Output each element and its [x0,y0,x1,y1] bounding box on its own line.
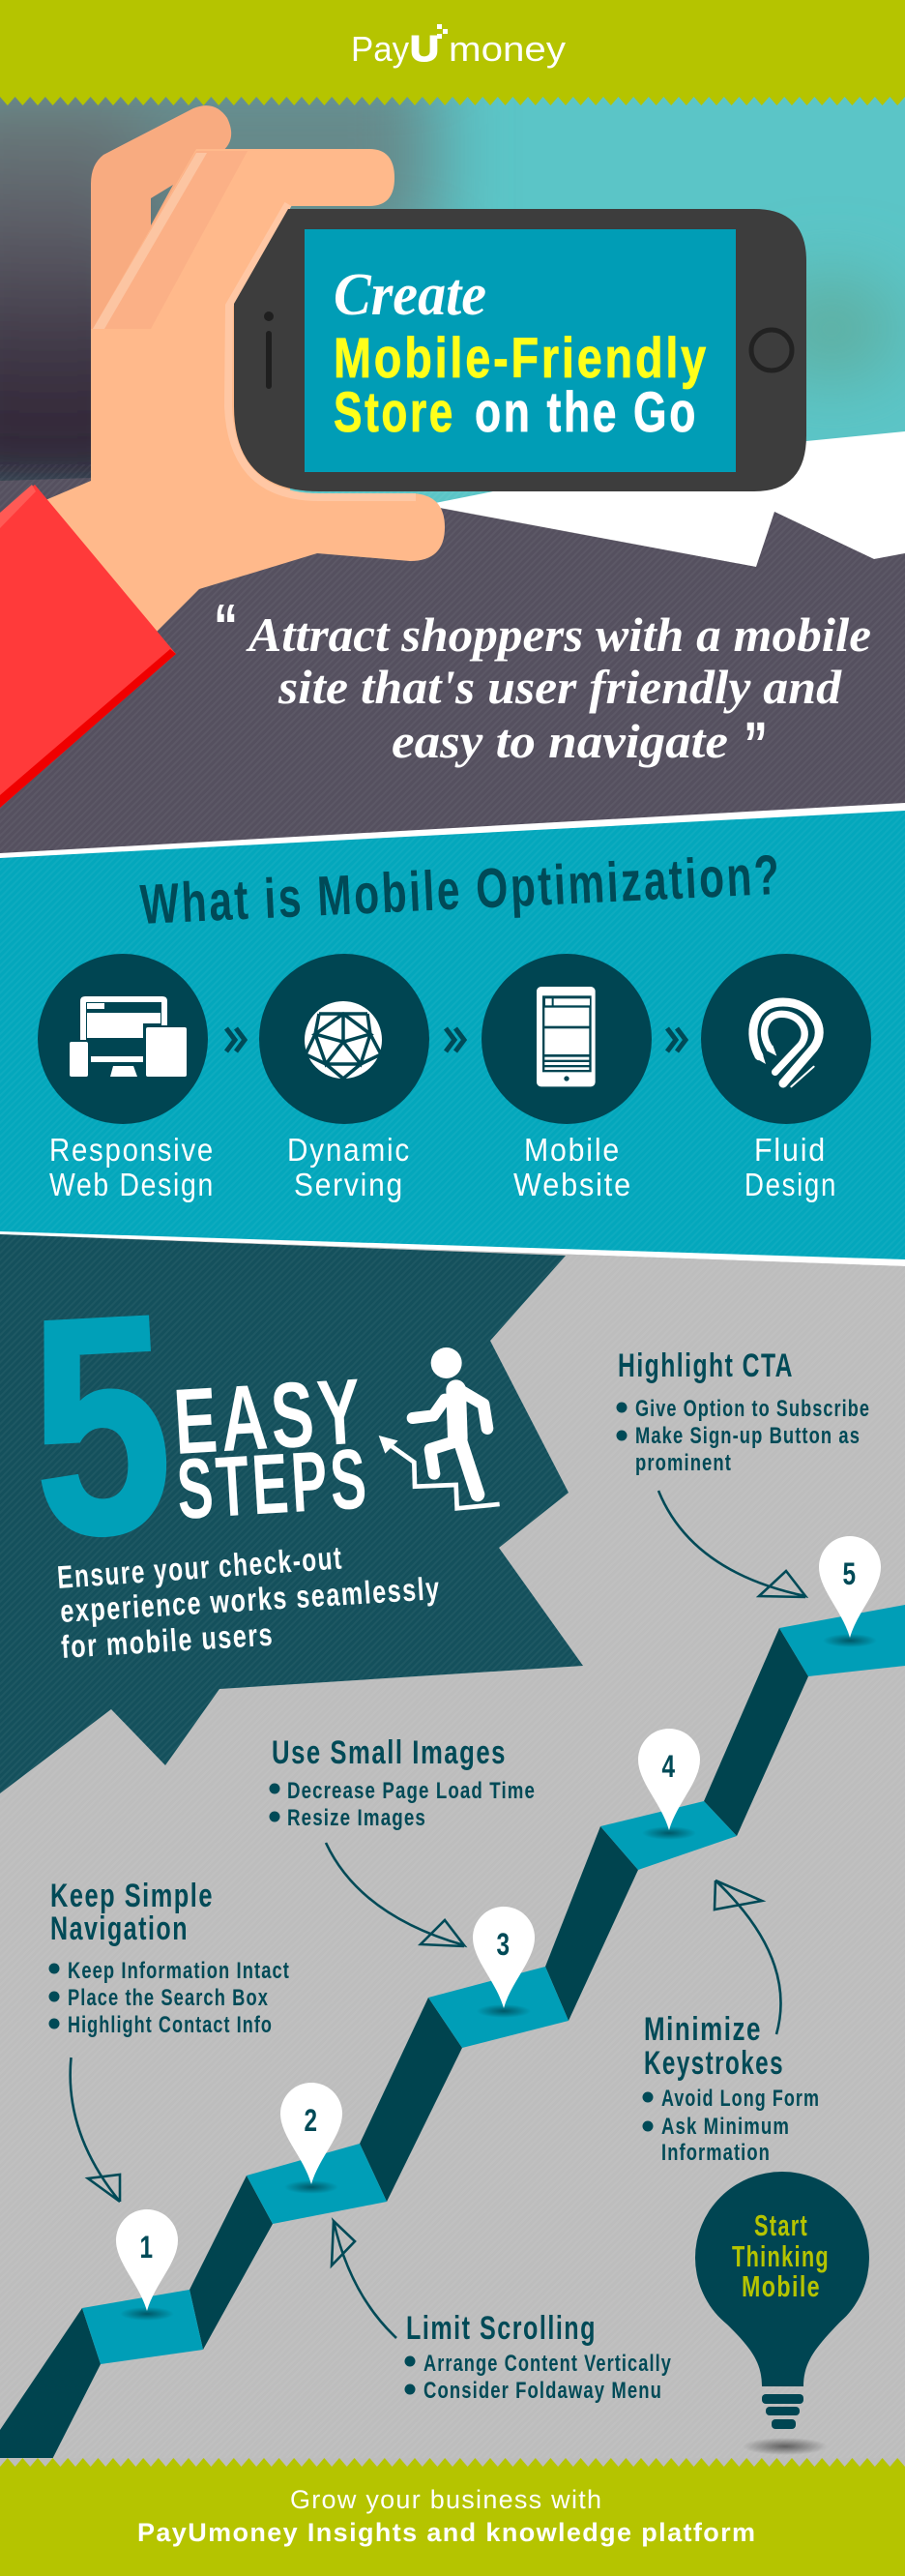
phone speaker [264,311,274,389]
tagline: experience works seamlessly [59,1570,442,1629]
headline: Store [334,381,455,444]
light bulb: start thinking mobile [695,2172,869,2455]
item: mobile website [482,954,652,1202]
heading: 5 easy steps [24,1251,372,1601]
item: dynamic serving [259,954,429,1202]
pin 4 [638,1729,700,1840]
quote [214,591,871,779]
phone home button [751,330,792,370]
label [513,1132,632,1202]
step 2: limit scrolling: Arrange Content Vertically [423,2351,672,2377]
quote: easy to navigate [392,714,728,768]
dark risers [0,1628,808,2476]
step 3: use small images: Use Small Images [272,1734,507,1771]
header bar [0,0,905,105]
pin 4: 4 [661,1749,677,1784]
arrow: to step 5 [658,1491,805,1597]
label: Responsive [49,1132,215,1168]
palm highlight [228,204,416,497]
teal treads [82,1605,905,2364]
pin 2 [280,2083,342,2194]
heading: 5 easy steps: EASY [171,1359,367,1474]
quote: Attract shoppers with a mobile [246,607,871,662]
logo: PayUmoney: money [449,29,566,69]
footer [0,2458,905,2576]
item: fluid design [701,954,871,1202]
footer: PayUmoney Insights and knowledge platform [137,2518,755,2547]
hero dark panel [0,478,905,871]
icon: geodesic sphere [305,1001,382,1079]
footer: Grow your business with [290,2485,601,2514]
icon: person climbing stairs [379,1347,500,1508]
step 1: keep simple navigation: Keep Simple [50,1878,214,1914]
step 1: keep simple navigation: Navigation [50,1910,189,1947]
tagline: Ensure your check-out [56,1539,344,1595]
heading: 5 easy steps: STEPS [174,1430,372,1537]
step 2: limit scrolling: Limit Scrolling [406,2310,597,2347]
step 4: minimize keystrokes: Ask Minimum [661,2114,790,2140]
step 3: use small images [269,1734,536,1831]
label: Fluid [754,1132,827,1168]
back finger [91,105,231,334]
sleeve [0,485,176,808]
light bulb: start thinking mobile: Thinking [732,2239,830,2273]
step 4: minimize keystrokes [642,2011,820,2166]
step 4: minimize keystrokes: Minimize [644,2011,762,2048]
arrow: chevrons 3 [667,1028,686,1051]
logo: PayUmoney [351,24,566,69]
step 5: highlight CTA: prominent [635,1450,732,1476]
icon: devices [70,996,187,1077]
tagline [56,1539,442,1665]
step 2: limit scrolling [404,2310,672,2404]
hero background [0,97,905,503]
logo: PayUmoney: U [410,29,439,69]
section: five steps background [0,1234,905,2476]
step 1: keep simple navigation: Highlight Contact Info [68,2012,273,2038]
hero lower white shard [425,431,905,567]
step 5: highlight CTA [617,1347,870,1476]
front finger and palm [39,149,445,643]
step 4: minimize keystrokes: Information [661,2140,771,2166]
closing quote mark: ” [744,709,771,779]
step 3: use small images: Decrease Page Load Time [287,1778,536,1804]
step 4: minimize keystrokes: Keystrokes [644,2045,784,2082]
decorative hatch [0,464,905,2476]
pin 1: 1 [139,2230,155,2265]
arrow: to step 1 [71,2058,120,2202]
headline: on the Go [475,381,698,444]
arrow: to step 3 [326,1843,464,1946]
phone screen [305,229,736,472]
light bulb: start thinking mobile: Mobile [742,2269,821,2303]
arrow: to step 2 [332,2221,396,2338]
label: Mobile [524,1132,621,1168]
step 2: limit scrolling: Consider Foldaway Menu [423,2378,662,2404]
label: Web Design [49,1167,215,1202]
light bulb: start thinking mobile: Start [754,2208,808,2242]
icon: phone [537,987,596,1086]
arrow: to step 4 [715,1880,781,2034]
item: responsive web design [38,954,215,1202]
arrow: chevrons 2 [446,1028,464,1051]
section: what is mobile optimization background [0,803,905,1266]
finger mid-tone [93,151,248,329]
label: Dynamic [287,1132,411,1168]
step 4: minimize keystrokes: Avoid Long Form [661,2086,820,2112]
phone body [234,209,806,491]
staircase [0,1605,905,2476]
quote: site that's user friendly and [277,660,842,714]
label: Serving [294,1167,404,1202]
headline [334,262,709,444]
illustration: hand holding phone [0,105,806,808]
icon: bent pencils [753,1002,819,1086]
pin 1 [116,2209,178,2321]
finger highlight [93,153,207,329]
big number 5: 5 [24,1251,178,1601]
label [287,1132,411,1202]
pin 2: 2 [304,2103,319,2138]
pin 5 [819,1536,881,1647]
arrow: chevrons 1 [226,1028,245,1051]
step 3: use small images: Resize Images [287,1805,426,1831]
pin 3: 3 [497,1927,511,1962]
step 1: keep simple navigation: Keep Information Intact [68,1958,290,1984]
logo: PayUmoney: Pay [351,29,409,69]
five easy steps banner shape [0,1234,583,1793]
step 5: highlight CTA: Highlight CTA [618,1347,794,1384]
step 1: keep simple navigation [48,1878,290,2038]
label: Website [513,1167,632,1202]
pin 3 [473,1907,535,2018]
step 1: keep simple navigation: Place the Search Box [68,1985,269,2011]
label [49,1132,215,1202]
label: Design [744,1167,837,1202]
tagline: for mobile users [60,1616,275,1665]
headline: Mobile-Friendly [334,327,709,390]
pin 5: 5 [843,1556,857,1591]
headline: Create [334,262,486,328]
label [744,1132,837,1202]
opening quote mark: “ [214,591,241,661]
